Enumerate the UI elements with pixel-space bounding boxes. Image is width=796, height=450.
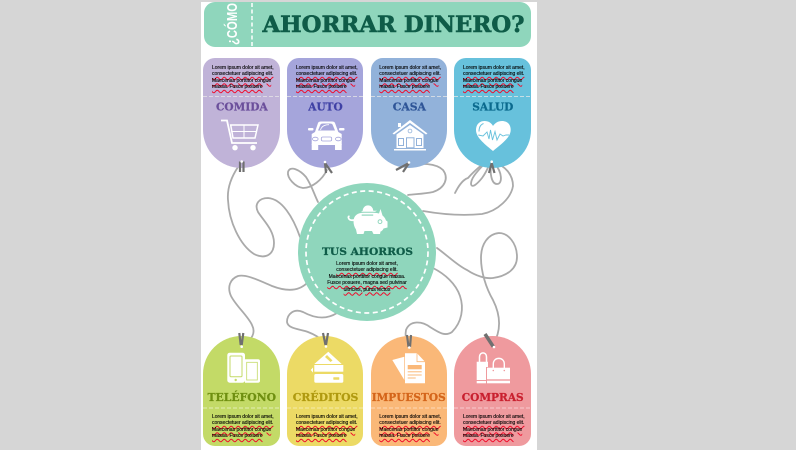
- text: créditos description: massa. Fusce posuere: [296, 433, 347, 439]
- icon: phone and tablet: [227, 353, 260, 383]
- text: auto description: Lorem ipsum dolor sit amet,: [296, 64, 358, 70]
- text: impuestos description: Lorem ipsum dolor sit amet,: [379, 414, 441, 420]
- text: compras description: Lorem ipsum dolor sit amet,: [463, 414, 525, 420]
- text: salud description: massa. Fusce posuere: [463, 84, 514, 90]
- text: impuestos description: massa. Fusce posuere: [379, 433, 430, 439]
- text: compras description: Maecenas porttitor congue: [463, 426, 522, 432]
- tag: compras: [454, 336, 531, 446]
- text: salud description: Maecenas porttitor congue: [463, 78, 522, 84]
- text: casa description: massa. Fusce posuere: [379, 84, 430, 90]
- tag: teléfono: [203, 336, 280, 446]
- text: impuestos description: Maecenas porttitor congue: [379, 426, 438, 432]
- text: salud description: [463, 64, 525, 94]
- text: savings description: Lorem ipsum dolor sit amet,: [336, 260, 398, 266]
- title banner: [204, 2, 531, 47]
- text: savings description: [327, 260, 407, 296]
- text: salud description: consectetuer adipiscing elit.: [463, 71, 524, 77]
- icon: shopping bags: [477, 353, 510, 383]
- central savings circle: TUS AHORROS: [322, 246, 413, 258]
- text: comida description: consectetuer adipiscing elit.: [212, 71, 273, 77]
- tag: créditos: CRÉDITOS: [293, 390, 358, 404]
- text: compras description: [463, 414, 525, 442]
- page background panel: [201, 2, 537, 450]
- text: casa description: Lorem ipsum dolor sit amet,: [379, 64, 441, 70]
- icon: car: [308, 122, 344, 150]
- text: comida description: Lorem ipsum dolor sit amet,: [212, 64, 274, 70]
- tag: impuestos: [371, 336, 447, 446]
- text: teléfono description: [212, 414, 274, 442]
- tag: créditos: [287, 336, 363, 446]
- tag: salud: [454, 58, 531, 168]
- text: impuestos description: consectetuer adipiscing elit.: [379, 420, 441, 426]
- tag: impuestos: IMPUESTOS: [372, 391, 446, 404]
- text: compras description: massa. Fusce posuere: [463, 433, 514, 439]
- text: teléfono description: Lorem ipsum dolor sit amet,: [212, 414, 274, 420]
- text: comida description: [212, 64, 274, 94]
- text: savings description: consectetuer adipiscing elit.: [336, 267, 398, 273]
- icon: piggy bank: [348, 205, 388, 234]
- tag: casa: CASA: [393, 101, 426, 114]
- tag: salud: SALUD: [472, 101, 514, 114]
- text: teléfono description: consectetuer adipiscing elit.: [212, 420, 273, 426]
- icon: house: [392, 120, 428, 150]
- tag: compras: COMPRAS: [462, 391, 524, 404]
- central savings circle: [298, 183, 436, 321]
- text: auto description: consectetuer adipiscing elit.: [296, 71, 357, 77]
- text: teléfono description: Maecenas porttitor congue: [212, 426, 271, 432]
- text: auto description: [296, 64, 358, 94]
- tag: teléfono: TELÉFONO: [208, 390, 276, 404]
- text: compras description: consectetuer adipiscing elit.: [463, 420, 524, 426]
- text: créditos description: Lorem ipsum dolor sit amet,: [296, 414, 358, 420]
- text: impuestos description: [379, 414, 441, 442]
- text: auto description: massa. Fusce posuere: [296, 84, 347, 90]
- title banner: AHORRAR DINERO?: [261, 12, 524, 38]
- icon: cart wheels: [232, 145, 256, 150]
- text: teléfono description: massa. Fusce posuere: [212, 433, 263, 439]
- text: créditos description: [296, 414, 358, 442]
- text: savings description: ultricies, purus lectus: [344, 286, 390, 292]
- text: casa description: Maecenas porttitor congue: [379, 78, 438, 84]
- text: comida description: massa. Fusce posuere: [212, 84, 263, 90]
- text: auto description: Maecenas porttitor congue: [296, 78, 355, 84]
- text: casa description: consectetuer adipiscing elit.: [379, 71, 441, 77]
- tag: auto: [287, 58, 363, 168]
- tag: comida: [203, 58, 280, 168]
- text: casa description: [379, 64, 441, 94]
- text: savings description: Maecenas porttitor congue massa.: [329, 274, 405, 280]
- text: comida description: Maecenas porttitor congue: [212, 78, 271, 84]
- icon: heart with pulse: [476, 121, 511, 151]
- text: savings description: Fusce posuere, magna sed pulvinar: [327, 280, 407, 286]
- tag: casa: [371, 58, 447, 168]
- tag: auto: AUTO: [307, 101, 343, 114]
- text: créditos description: Maecenas porttitor congue: [296, 426, 355, 432]
- text: créditos description: consectetuer adipiscing elit.: [296, 420, 357, 426]
- icon: tax documents: [392, 353, 425, 383]
- icon: credit card: [311, 352, 343, 383]
- text: salud description: Lorem ipsum dolor sit amet,: [463, 64, 525, 70]
- tag: comida: COMIDA: [216, 101, 268, 114]
